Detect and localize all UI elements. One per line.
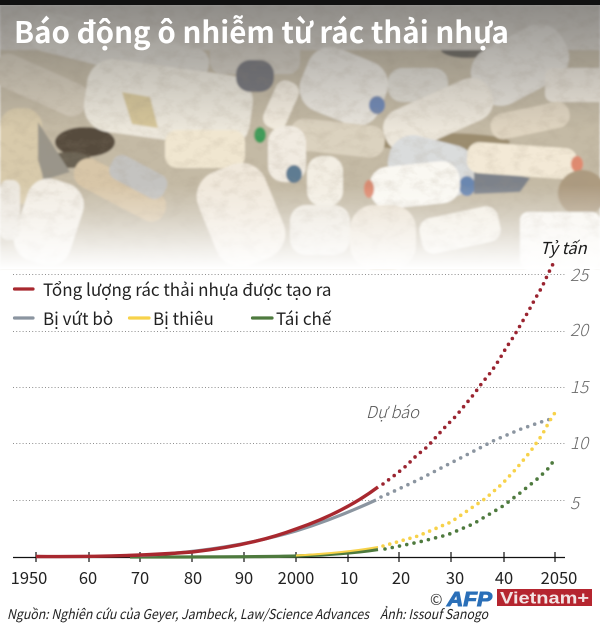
x axis labels: 70 bbox=[131, 565, 149, 589]
x axis labels: 10 bbox=[340, 565, 358, 589]
y axis labels: 5 bbox=[570, 489, 581, 514]
legend bbox=[14, 276, 332, 330]
logo: AFP: © bbox=[430, 589, 442, 610]
x axis labels: 1950 bbox=[11, 565, 47, 589]
line: total waste forecast bbox=[383, 262, 554, 484]
legend item: total waste: Tổng lượng rác thải nhựa được tạo ra bbox=[43, 276, 331, 301]
gridlines bbox=[13, 274, 565, 500]
legend item: recycled: Tái chế bbox=[276, 305, 332, 330]
source credit: Nguồn: Nghiên cứu của Geyer, Jambeck, Law/Science Advances bbox=[7, 603, 371, 623]
legend item: recycled bbox=[252, 305, 332, 330]
x axis labels: 90 bbox=[235, 565, 253, 589]
photo: plastic bottle waste bbox=[0, 5, 600, 275]
logo: AFP: AFP bbox=[446, 589, 493, 611]
x axis bbox=[13, 552, 565, 562]
forecast label: Dự báo bbox=[366, 399, 420, 423]
x axis labels: 2000 bbox=[278, 565, 314, 589]
logo: Vietnam+: Vietnam+ bbox=[500, 588, 589, 608]
x axis labels: 20 bbox=[392, 565, 410, 589]
title: Báo động ô nhiễm từ rác thải nhựa bbox=[14, 10, 509, 52]
x axis labels: 60 bbox=[79, 565, 97, 589]
photo credit: Ảnh: Issouf Sanogo bbox=[380, 603, 490, 623]
y axis unit: Tỷ tấn bbox=[540, 235, 588, 259]
y axis labels: 10 bbox=[570, 429, 590, 454]
line: discarded historical bbox=[140, 500, 376, 556]
line: incinerated forecast bbox=[383, 411, 556, 546]
line: recycled forecast bbox=[385, 459, 555, 549]
legend item: discarded: Bị vứt bỏ bbox=[43, 305, 113, 330]
x axis labels: 30 bbox=[446, 565, 464, 589]
legend item: incinerated: Bị thiêu bbox=[153, 305, 214, 330]
top black strip bbox=[0, 0, 600, 5]
y axis labels bbox=[570, 261, 590, 514]
line: recycled historical bbox=[130, 550, 378, 557]
line: incinerated historical bbox=[296, 547, 378, 556]
logo: AFP bbox=[430, 589, 493, 611]
line: discarded forecast bbox=[381, 418, 554, 497]
x axis labels: 40 bbox=[495, 565, 513, 589]
line: total waste historical bbox=[36, 487, 378, 557]
x axis labels: 2050 bbox=[541, 565, 577, 589]
x axis labels: 80 bbox=[184, 565, 202, 589]
y axis labels: 25 bbox=[570, 261, 590, 286]
y axis labels: 15 bbox=[570, 373, 590, 398]
y axis labels: 20 bbox=[570, 316, 590, 341]
x axis labels bbox=[11, 565, 577, 589]
